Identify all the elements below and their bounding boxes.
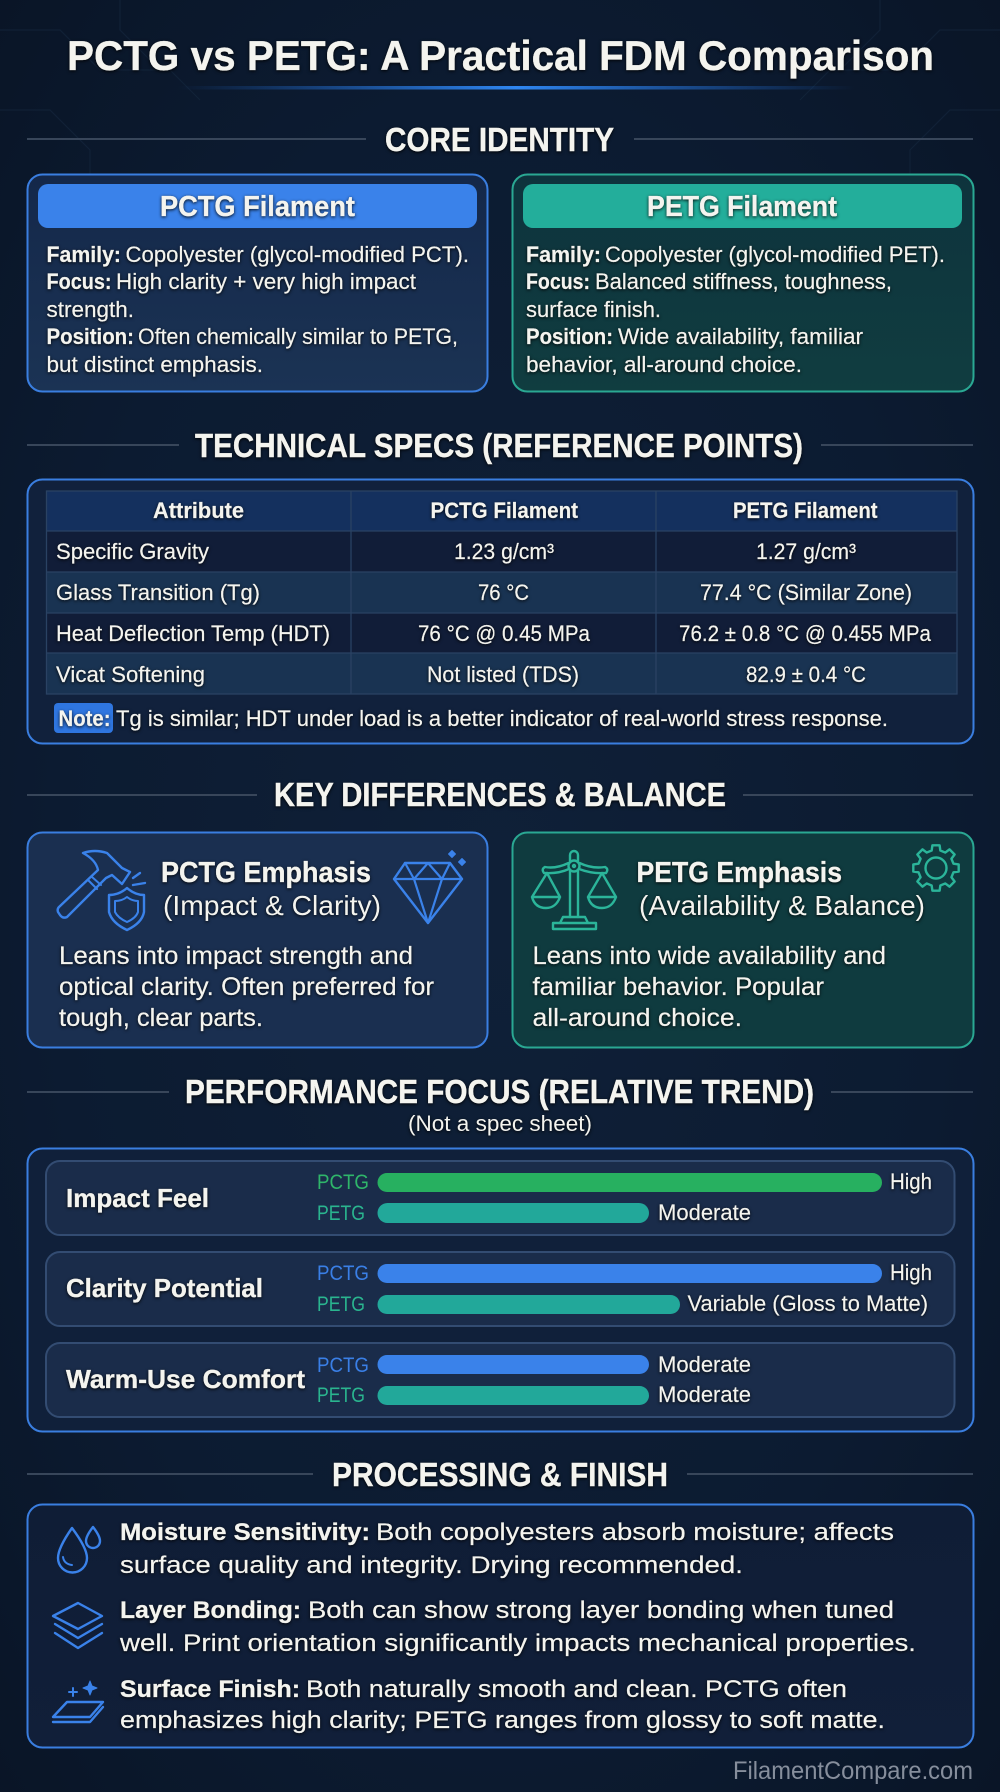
moisture sensitivity text: [120, 1519, 894, 1579]
PETG description: Focus:: [526, 269, 590, 294]
icon: surface finish: [53, 1681, 103, 1722]
bars: warm-use comfort: Moderate: [658, 1352, 751, 1377]
icon: scales: [532, 851, 616, 929]
row: warm-use comfort: Warm-Use Comfort: [66, 1364, 305, 1394]
icon: gear: [913, 845, 959, 891]
bars: impact feel: PCTG: [317, 1170, 369, 1194]
PETG description: surface finish.: [526, 297, 661, 322]
panel: PCTG emphasis: [28, 832, 488, 1048]
PCTG emphasis heading: [161, 857, 381, 921]
PCTG emphasis text: Leans into impact strength and: [59, 942, 413, 970]
layer bonding text: Both can show strong layer bonding when tuned: [308, 1597, 894, 1624]
surface finish text: Surface Finish:: [120, 1676, 300, 1703]
PCTG emphasis text: optical clarity. Often preferred for: [59, 973, 434, 1001]
row: clarity potential: Clarity Potential: [66, 1273, 263, 1303]
bars: impact feel: High: [890, 1169, 932, 1194]
PCTG description: Often chemically similar to PETG,: [138, 324, 458, 349]
spec table: 1.23 g/cm³: [454, 539, 554, 564]
PETG description: [526, 242, 945, 377]
PCTG header bar: PCTG Filament: [160, 191, 355, 223]
PETG description: Balanced stiffness, toughness,: [595, 269, 892, 294]
layer bonding text: [119, 1597, 916, 1657]
row: clarity potential: [46, 1252, 954, 1326]
panel: PETG filament: [512, 174, 974, 392]
spec table: [46, 491, 957, 694]
row: warm-use comfort: [46, 1343, 954, 1417]
PETG description: Position:: [526, 324, 613, 349]
PCTG description: [46, 242, 469, 377]
surface finish text: emphasizes high clarity; PETG ranges from glossy to soft matte.: [120, 1707, 885, 1734]
PCTG description: Copolyester (glycol-modified PCT).: [126, 242, 469, 267]
bars: warm-use comfort: Moderate: [658, 1382, 751, 1407]
footer watermark: FilamentCompare.com: [733, 1757, 973, 1785]
PETG description: Wide availability, familiar: [618, 324, 864, 349]
PCTG description: High clarity + very high impact: [116, 269, 417, 294]
bars: warm-use comfort: PCTG: [317, 1353, 369, 1377]
PETG emphasis heading: [636, 857, 925, 921]
section heading: key differences: KEY DIFFERENCES & BALANCE: [274, 776, 726, 813]
section heading: performance focus: PERFORMANCE FOCUS (RELATIVE TREND): [185, 1073, 814, 1110]
PETG emphasis heading: PETG Emphasis: [636, 857, 842, 889]
spec table: 76 °C: [478, 580, 529, 605]
PETG emphasis heading: (Availability & Balance): [639, 890, 925, 921]
PETG description: Family:: [526, 242, 601, 267]
PCTG emphasis heading: PCTG Emphasis: [161, 857, 371, 889]
spec table: 77.4 °C (Similar Zone): [700, 580, 912, 605]
spec table: Attribute: [153, 498, 244, 523]
bars: clarity potential: PCTG: [317, 1261, 369, 1285]
icon: layers: [53, 1603, 102, 1648]
spec table: PCTG Filament: [430, 498, 579, 523]
spec table: Glass Transition (Tg): [56, 580, 260, 605]
bars: clarity potential: PETG: [317, 1292, 365, 1316]
bars: warm-use comfort: [317, 1352, 751, 1407]
PETG header bar: [523, 184, 962, 228]
surface finish text: Both naturally smooth and clean. PCTG often: [306, 1676, 847, 1703]
PCTG description: Family:: [46, 242, 121, 267]
moisture sensitivity text: surface quality and integrity. Drying recommended.: [120, 1552, 743, 1579]
spec table: PETG Filament: [733, 498, 878, 523]
spec table: 82.9 ± 0.4 °C: [746, 662, 866, 687]
spec table: 76.2 ± 0.8 °C @ 0.455 MPa: [679, 621, 932, 646]
layer bonding text: well. Print orientation significantly impacts mechanical properties.: [119, 1630, 916, 1657]
icon: water drops: [58, 1527, 100, 1572]
surface finish text: [120, 1676, 885, 1734]
moisture sensitivity text: Moisture Sensitivity:: [120, 1519, 370, 1546]
section heading: technical specs: TECHNICAL SPECS (REFERENCE POINTS): [195, 427, 803, 464]
icon: hammer and shield: [58, 851, 145, 930]
PETG description: behavior, all-around choice.: [526, 352, 802, 377]
PCTG emphasis text: tough, clear parts.: [59, 1004, 263, 1032]
moisture sensitivity text: Both copolyesters absorb moisture; affects: [376, 1519, 894, 1546]
bars: impact feel: [317, 1169, 932, 1225]
bars: clarity potential: High: [890, 1260, 932, 1285]
spec table: Not listed (TDS): [427, 662, 579, 687]
panel: processing and finish: [28, 1504, 974, 1748]
PCTG emphasis heading: (Impact & Clarity): [163, 890, 381, 921]
PCTG emphasis text: [59, 942, 434, 1032]
icon: diamond: [394, 850, 466, 923]
bars: warm-use comfort: PETG: [317, 1383, 365, 1407]
row: impact feel: Impact Feel: [66, 1183, 209, 1213]
PCTG description: Focus:: [46, 269, 112, 294]
title: PCTG vs PETG: A Practical FDM Comparison: [67, 32, 934, 79]
bars: impact feel: PETG: [317, 1201, 365, 1225]
PCTG description: strength.: [46, 297, 134, 322]
spec table: 1.27 g/cm³: [756, 539, 856, 564]
PETG emphasis text: all-around choice.: [532, 1004, 742, 1032]
panel: technical specs: [28, 480, 974, 744]
PETG emphasis text: familiar behavior. Popular: [532, 973, 824, 1001]
bars: clarity potential: Variable (Gloss to Matte): [688, 1291, 928, 1316]
PETG emphasis text: [532, 942, 886, 1032]
bars: impact feel: Moderate: [658, 1200, 751, 1225]
bars: clarity potential: [317, 1260, 932, 1316]
PETG description: Copolyester (glycol-modified PET).: [605, 242, 945, 267]
spec table: 76 °C @ 0.45 MPa: [418, 621, 591, 646]
note: Tg is similar; HDT under load is a better indicator of real-world stress response.: [116, 706, 888, 731]
spec table: Specific Gravity: [56, 539, 209, 564]
PCTG header bar: [38, 184, 477, 228]
row: impact feel: [46, 1161, 954, 1235]
spec table: Vicat Softening: [56, 662, 205, 687]
section heading: core identity: CORE IDENTITY: [385, 121, 614, 158]
note: Note:: [58, 706, 110, 731]
panel: performance focus: [28, 1148, 974, 1432]
PCTG description: Position:: [46, 324, 134, 349]
panel: PCTG filament: [28, 174, 488, 392]
PETG emphasis text: Leans into wide availability and: [532, 942, 886, 970]
PETG header bar: PETG Filament: [647, 191, 837, 223]
subtitle: (Not a spec sheet): [408, 1111, 592, 1136]
panel: PETG emphasis: [512, 832, 974, 1048]
PCTG description: but distinct emphasis.: [46, 352, 263, 377]
spec table: Heat Deflection Temp (HDT): [56, 621, 330, 646]
layer bonding text: Layer Bonding:: [120, 1597, 301, 1624]
section heading: processing and finish: PROCESSING & FINISH: [332, 1456, 668, 1493]
